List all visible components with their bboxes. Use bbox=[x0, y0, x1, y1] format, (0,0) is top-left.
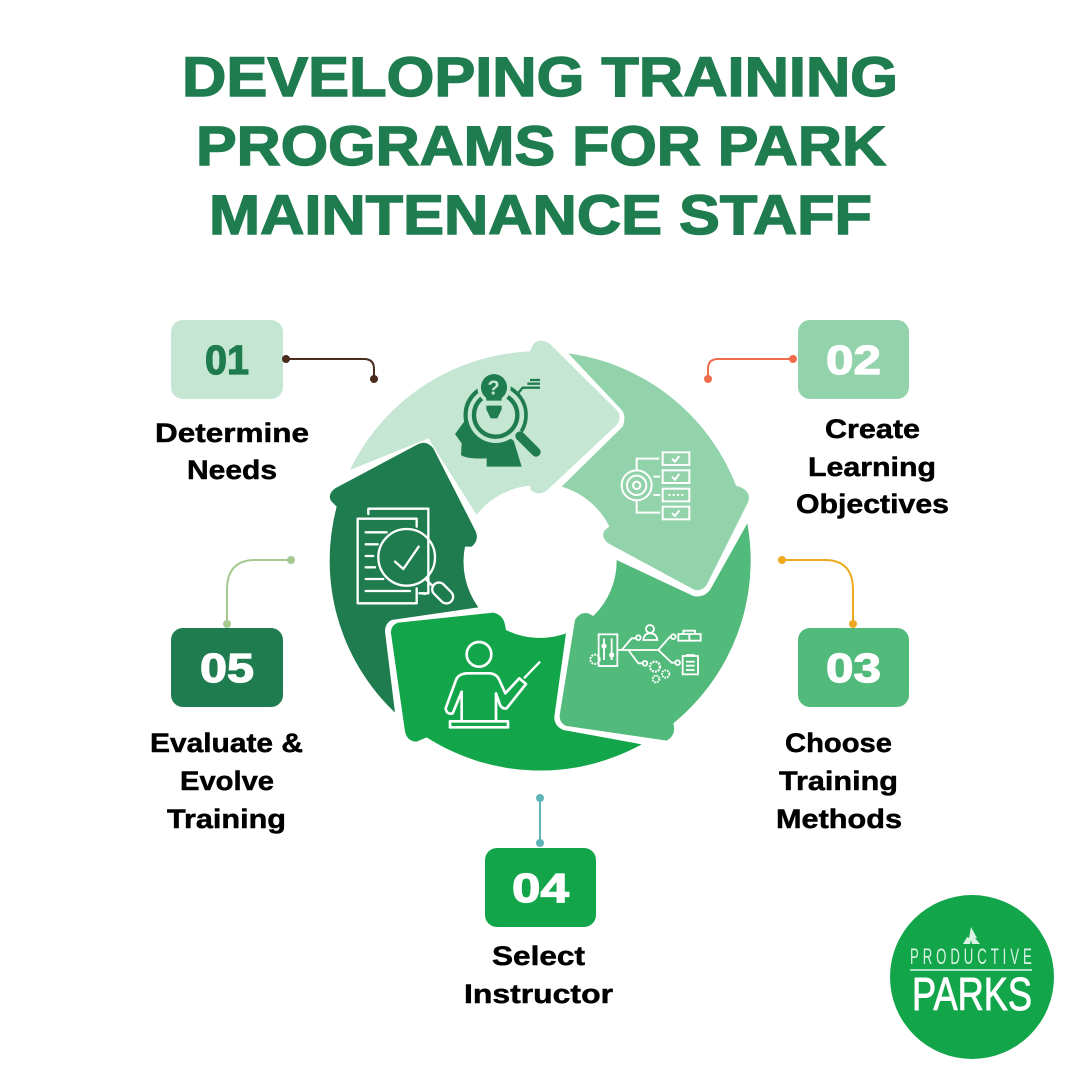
label 04: Instructor bbox=[464, 979, 614, 1009]
step 05 bbox=[150, 556, 303, 834]
title: PROGRAMS FOR PARK bbox=[196, 114, 886, 177]
label 04: Select bbox=[492, 941, 585, 971]
connector 01 bbox=[282, 355, 378, 383]
segment 3: choose training methods bbox=[560, 523, 751, 741]
icon: trees bbox=[963, 927, 980, 944]
badge 04: 04 bbox=[512, 865, 569, 911]
segment 5: evaluate and evolve bbox=[330, 443, 478, 713]
badge 01: 01 bbox=[205, 337, 249, 383]
icon: instructor with pointer bbox=[446, 642, 540, 727]
logo: productive parks: PARKS bbox=[912, 968, 1032, 1020]
step 02 bbox=[704, 320, 949, 519]
badge 03 bbox=[798, 628, 909, 707]
logo: productive parks bbox=[890, 895, 1054, 1059]
label 05: Evaluate & bbox=[150, 728, 303, 758]
label 01: Needs bbox=[187, 455, 277, 485]
label 03: Methods bbox=[776, 804, 902, 834]
label 01 bbox=[155, 418, 309, 485]
segment 2: create learning objectives bbox=[562, 353, 749, 590]
label 02 bbox=[796, 414, 949, 519]
connector 02 bbox=[704, 355, 797, 383]
label 05 bbox=[150, 728, 303, 834]
logo: productive parks: PRODUCTIVE bbox=[910, 945, 1032, 969]
icon: head with magnifier: ? bbox=[488, 378, 500, 400]
cycle diagram bbox=[330, 341, 751, 771]
label 03 bbox=[776, 728, 902, 834]
segment 1: determine needs bbox=[350, 341, 620, 515]
label 05: Training bbox=[167, 804, 286, 834]
connector 04 bbox=[536, 794, 544, 847]
step 04 bbox=[464, 794, 614, 1009]
badge 03: 03 bbox=[826, 645, 881, 691]
step 01 bbox=[155, 320, 378, 485]
connector 05 bbox=[223, 556, 295, 628]
badge 05 bbox=[171, 628, 283, 707]
label 01: Determine bbox=[155, 418, 309, 448]
step 03 bbox=[776, 556, 909, 834]
segment 4: select instructor bbox=[391, 613, 642, 771]
title bbox=[182, 45, 898, 246]
label 02: Objectives bbox=[796, 489, 949, 519]
connector 03 bbox=[778, 556, 857, 628]
badge 02: 02 bbox=[826, 337, 881, 383]
icon: document with magnifier bbox=[358, 509, 456, 606]
label 02: Create bbox=[825, 414, 920, 444]
icon: process flow bbox=[590, 625, 701, 682]
badge 02 bbox=[798, 320, 909, 399]
badge 04 bbox=[485, 848, 596, 927]
icon: target and checklist bbox=[622, 452, 689, 519]
title: MAINTENANCE STAFF bbox=[209, 183, 872, 246]
label 03: Training bbox=[779, 766, 898, 796]
title: DEVELOPING TRAINING bbox=[182, 45, 898, 108]
badge 01 bbox=[171, 320, 283, 399]
icon: head with magnifier bbox=[455, 371, 540, 467]
label 03: Choose bbox=[785, 728, 892, 758]
badge 05: 05 bbox=[200, 645, 254, 691]
label 04 bbox=[464, 941, 614, 1009]
label 05: Evolve bbox=[180, 766, 274, 796]
label 02: Learning bbox=[808, 452, 936, 482]
